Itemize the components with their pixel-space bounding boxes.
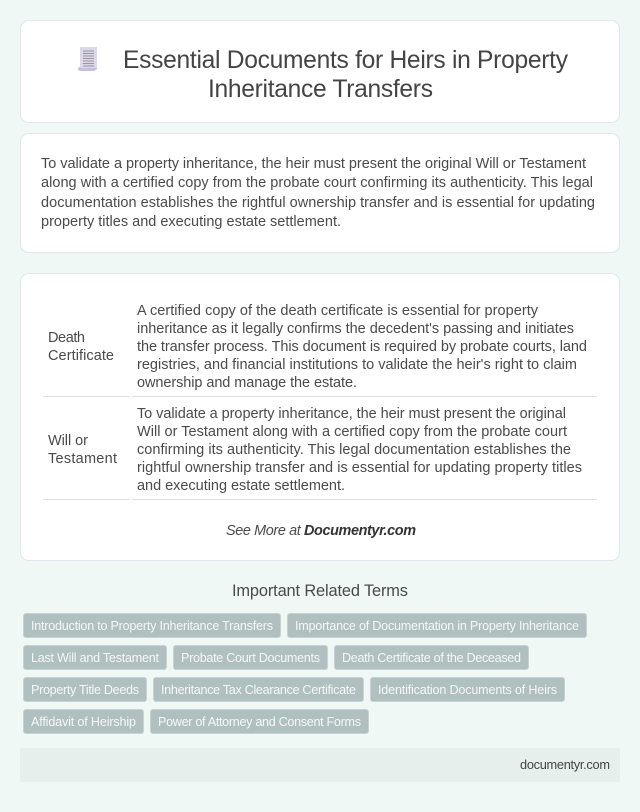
row: death certificate (48, 303, 587, 391)
heading: related terms: Important Related Terms (232, 582, 408, 600)
intro text: documentation establishes the rightful ownership transfer and is essential for updating (41, 195, 595, 211)
intro text (41, 156, 595, 230)
row: death certificate: Death (48, 330, 85, 346)
related term tags: Probate Court Documents (181, 651, 320, 665)
related term tags: Identification Documents of Heirs (378, 683, 557, 697)
row: will or testament: confirming its authenticity. This legal documentation establishes the (137, 442, 571, 458)
row: death certificate: inheritance as it legally confirms the decedent's passing and initiates (137, 321, 574, 337)
related term tags: Importance of Documentation in Property Inheritance (295, 619, 579, 633)
related term tags: Introduction to Property Inheritance Transfers (31, 619, 273, 633)
row: will or testament: To validate a property inheritance, the heir must present the original (137, 406, 566, 422)
related term tags (24, 614, 586, 734)
icon: document scroll (78, 47, 97, 71)
related term tags: Affidavit of Heirship (31, 715, 136, 729)
row: will or testament: Will or (48, 433, 88, 449)
title: Inheritance Transfers (208, 76, 433, 103)
related term tags: Death Certificate of the Deceased (342, 651, 521, 665)
row: will or testament: Testament (48, 451, 117, 467)
row: death certificate: registries, and financial institutions to validate the heir's right to claim (137, 357, 577, 373)
row: death certificate: Certificate (48, 348, 114, 364)
panel: documents table (20, 274, 620, 560)
intro text: property titles and executing estate settlement. (41, 214, 341, 230)
row: death certificate: ownership and manage the estate. (137, 375, 357, 391)
intro text: along with a certified copy from the probate court confirming its authenticity. This legal (41, 175, 593, 191)
row: will or testament: and executing estate settlement. (137, 478, 345, 494)
see more link: See More at Documentyr.com (226, 523, 416, 539)
title: Essential Documents for Heirs in Property (123, 47, 569, 74)
row: will or testament (48, 406, 582, 494)
panel: introduction (20, 134, 620, 252)
related term tags: Property Title Deeds (31, 683, 139, 697)
row: death certificate: A certified copy of the death certificate is essential for property (137, 303, 539, 319)
title (123, 47, 569, 103)
row: will or testament: rightful ownership transfer and is essential for updating property titles (137, 460, 582, 476)
footer (20, 748, 620, 782)
related term tags: Power of Attorney and Consent Forms (158, 715, 361, 729)
intro text: To validate a property inheritance, the heir must present the original Will or Testament (41, 156, 586, 172)
related term tags: Inheritance Tax Clearance Certificate (161, 683, 356, 697)
footer: documentyr.com (520, 757, 610, 772)
row: will or testament: Will or Testament along with a certified copy from the probate court (137, 424, 567, 440)
related term tags: Last Will and Testament (31, 651, 160, 665)
panel: title header (20, 20, 620, 122)
row: death certificate: the transfer process. This document is required by probate courts, land (137, 339, 587, 355)
